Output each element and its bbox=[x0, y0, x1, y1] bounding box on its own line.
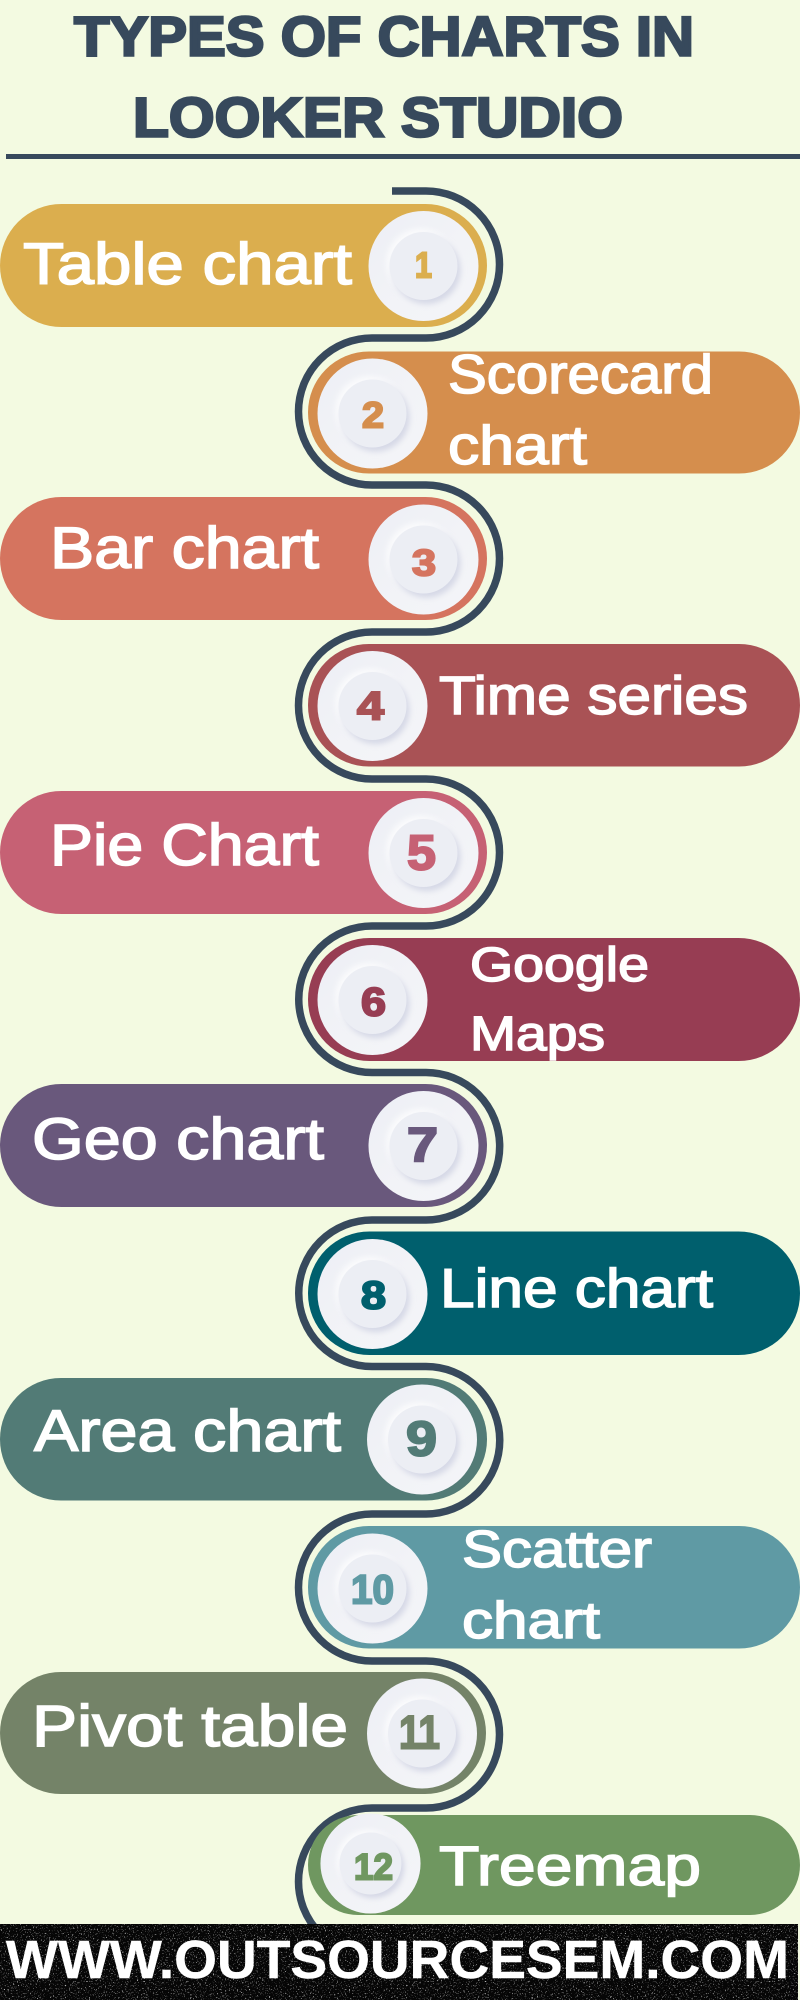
item 10: Scatter chart: 10 bbox=[351, 1566, 394, 1612]
item 7: Geo chart: 7 bbox=[407, 1120, 438, 1172]
item 1: Table chart bbox=[0, 204, 487, 327]
item 8: Line chart: 8 bbox=[361, 1274, 386, 1318]
item 4: Time series bbox=[308, 644, 800, 766]
item 2: Scorecard chart: Scorecard bbox=[448, 343, 713, 405]
item 9: Area chart: 9 bbox=[406, 1412, 437, 1466]
item 6: Google Maps bbox=[308, 938, 800, 1061]
item 2: Scorecard chart bbox=[308, 343, 800, 476]
item 5: Pie Chart: 5 bbox=[407, 826, 436, 880]
footer banner with website: WWW.OUTSOURCESEM.COM bbox=[6, 1930, 789, 1990]
item 7: Geo chart bbox=[0, 1084, 487, 1207]
title: TYPES OF CHARTS IN bbox=[74, 4, 694, 68]
item 10: Scatter chart: chart bbox=[462, 1592, 601, 1650]
item 11: Pivot table bbox=[0, 1672, 486, 1794]
item 6: Google Maps: 6 bbox=[361, 980, 386, 1024]
item 10: Scatter chart: Scatter bbox=[462, 1521, 652, 1579]
item 3: Bar chart: Bar chart bbox=[50, 516, 319, 581]
title bbox=[74, 4, 694, 148]
item 8: Line chart: Line chart bbox=[440, 1257, 713, 1319]
title: LOOKER STUDIO bbox=[133, 86, 623, 148]
item 4: Time series: 4 bbox=[357, 684, 385, 728]
item 1: Table chart: Table chart bbox=[23, 232, 352, 297]
item 12: Treemap bbox=[308, 1813, 800, 1915]
item 1: Table chart: 1 bbox=[415, 244, 432, 286]
winding connector line bbox=[298, 191, 500, 1955]
item 6: Google Maps: Maps bbox=[470, 1008, 605, 1061]
item 2: Scorecard chart: 2 bbox=[362, 394, 384, 436]
item 8: Line chart bbox=[308, 1232, 800, 1355]
item 5: Pie Chart: Pie Chart bbox=[50, 813, 319, 878]
item 12: Treemap: 12 bbox=[354, 1846, 393, 1888]
item 2: Scorecard chart: chart bbox=[448, 414, 587, 476]
item 5: Pie Chart bbox=[0, 791, 487, 914]
item 11: Pivot table: 11 bbox=[399, 1706, 440, 1758]
item 4: Time series: Time series bbox=[439, 666, 748, 726]
item 6: Google Maps: Google bbox=[470, 939, 649, 992]
item 10: Scatter chart bbox=[308, 1521, 800, 1650]
item 3: Bar chart: 3 bbox=[412, 542, 436, 584]
item 11: Pivot table: Pivot table bbox=[32, 1694, 348, 1759]
item 9: Area chart: Area chart bbox=[34, 1399, 341, 1464]
item 7: Geo chart: Geo chart bbox=[32, 1107, 324, 1172]
item 3: Bar chart bbox=[0, 497, 487, 620]
item 12: Treemap: Treemap bbox=[439, 1834, 701, 1897]
item 9: Area chart bbox=[0, 1378, 487, 1500]
